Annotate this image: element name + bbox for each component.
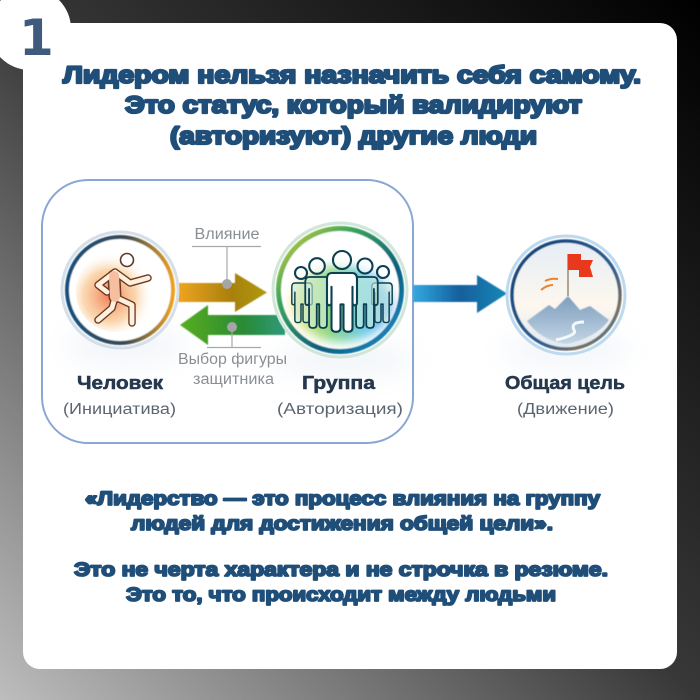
closing text block: Это не черта характера и не строчка в резюме. bbox=[74, 560, 608, 581]
warm halo bbox=[76, 252, 156, 332]
label: group bbox=[277, 373, 403, 418]
flag pole bbox=[567, 254, 569, 296]
label: group: (Авторизация) bbox=[277, 401, 403, 418]
quote text block: людей для достижения общей цели». bbox=[131, 514, 553, 535]
icon: goal circle bbox=[507, 236, 625, 354]
closing text block: Это то, что происходит между людьми bbox=[126, 585, 556, 606]
quote text block bbox=[85, 489, 600, 535]
callout: protector choice label: Выбор фигуры bbox=[178, 351, 287, 368]
number badge bbox=[0, 0, 71, 70]
inner colored ring bbox=[278, 228, 402, 352]
label: group: Группа bbox=[302, 373, 376, 393]
callout: influence label: Влияние bbox=[194, 226, 260, 243]
label: person bbox=[63, 373, 176, 418]
icon: group circle bbox=[273, 223, 407, 357]
badge circle bbox=[0, 0, 71, 70]
soft backdrop behind diagram bbox=[65, 323, 631, 380]
icon: person circle bbox=[62, 232, 178, 348]
arrow: influence from person to group bbox=[178, 273, 267, 312]
snow path bbox=[556, 322, 584, 340]
label: common goal: Общая цель bbox=[505, 373, 625, 393]
runner figure bbox=[98, 254, 148, 323]
title: Это статус, который валидируют bbox=[125, 92, 582, 119]
callout: protector choice label bbox=[178, 322, 287, 388]
title bbox=[63, 62, 641, 150]
label: person: (Инициатива) bbox=[63, 401, 176, 418]
label: common goal bbox=[505, 373, 625, 418]
flag bbox=[568, 254, 593, 277]
panel: person and group frame bbox=[42, 180, 413, 443]
mountains bbox=[527, 296, 609, 344]
motion strokes bbox=[541, 279, 558, 290]
label: common goal: (Движение) bbox=[517, 401, 614, 418]
callout: influence label bbox=[192, 226, 261, 289]
title: (авторизуют) другие люди bbox=[170, 123, 537, 150]
inner sky and ring bbox=[512, 241, 620, 349]
badge number: 1 bbox=[19, 9, 54, 67]
label: person: Человек bbox=[77, 373, 164, 393]
colored halo bbox=[292, 266, 392, 342]
quote text block: «Лидерство — это процесс влияния на группу bbox=[85, 489, 600, 510]
people figures bbox=[292, 251, 392, 332]
outer ring bbox=[273, 223, 407, 357]
callout: protector choice label: защитника bbox=[193, 371, 274, 388]
title: Лидером нельзя назначить себя самому. bbox=[63, 62, 641, 89]
closing text block bbox=[74, 560, 608, 606]
arrow: group to common goal bbox=[413, 275, 507, 313]
outer glow ring bbox=[62, 232, 178, 348]
arrow: choice from group to person bbox=[180, 305, 285, 345]
inner colored ring bbox=[67, 237, 173, 343]
outer ring bbox=[507, 236, 625, 354]
